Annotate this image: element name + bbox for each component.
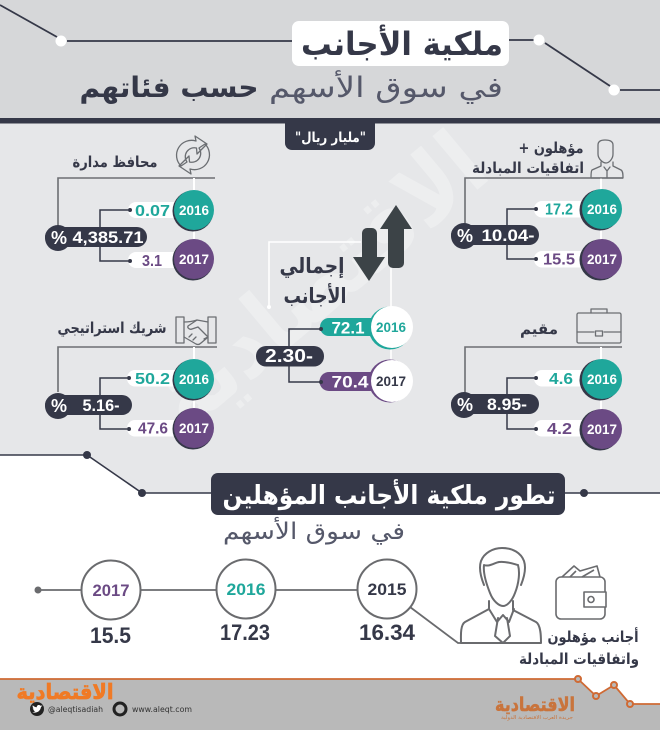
panel frame lines <box>58 178 215 226</box>
title box <box>292 21 509 66</box>
circle 2017: 2017 <box>587 422 617 437</box>
icon: twitter <box>30 702 44 716</box>
circle 2016: 2016 <box>179 372 209 387</box>
header band <box>0 0 660 118</box>
footer orange trend line <box>0 679 660 704</box>
panel: total foreigners: الأجانب <box>284 282 346 308</box>
circle 2017 <box>368 360 413 402</box>
node 2017: 2017 <box>92 581 130 600</box>
value 2017 <box>127 420 183 438</box>
value 2016 <box>534 201 589 218</box>
circle 2016 <box>172 190 214 232</box>
change pill <box>45 225 147 251</box>
value 2017 <box>534 251 589 268</box>
icon: refresh <box>177 136 209 174</box>
watermark: الاقتصادية <box>132 111 507 450</box>
website: www.aleqt.com <box>132 705 192 714</box>
twitter handle: @aleqtisadiah <box>48 705 103 714</box>
icon: briefcase <box>577 309 621 343</box>
icon: wallet <box>556 566 606 619</box>
value 2016: 50.2 <box>135 371 170 388</box>
node 2016: 17.23 <box>220 620 270 645</box>
node 2015 <box>358 560 416 645</box>
label: qualified foreign investors <box>519 627 639 668</box>
panel: qualified investors and swaps <box>451 139 623 280</box>
value 2017: 47.6 <box>138 420 168 438</box>
circle 2016: 2016 <box>587 202 617 217</box>
circle 2017 <box>580 409 622 450</box>
circle 2016 <box>580 189 622 230</box>
change pill <box>45 393 132 419</box>
value 2017: 3.1 <box>142 253 162 270</box>
connector <box>100 210 130 261</box>
node 2016 <box>216 560 276 645</box>
footer <box>0 676 660 730</box>
change pill: 10.04- <box>482 226 534 245</box>
heading connector lines <box>0 455 660 493</box>
label: مؤهلون + <box>518 139 584 157</box>
trend line dots <box>575 676 633 707</box>
section heading: qualified foreign ownership <box>0 451 660 545</box>
value 2017 <box>128 252 183 270</box>
circle 2017: 2017 <box>376 374 406 389</box>
unit badge: "مليار ريال" <box>295 130 366 146</box>
icon: up arrow <box>380 205 412 268</box>
title connector lines <box>0 5 660 90</box>
circle 2016 <box>172 359 214 400</box>
panel frame lines <box>465 178 623 225</box>
circle 2017: 2017 <box>179 252 209 267</box>
value 2017: 4.2 <box>547 421 572 438</box>
logo left: الاقتصادية <box>16 680 114 704</box>
title connector dots <box>56 34 620 96</box>
panel: resident <box>451 309 622 450</box>
connector <box>289 329 321 382</box>
value 2017 <box>534 420 589 438</box>
change pill: 8.95- <box>487 395 527 414</box>
node 2015: 16.34 <box>359 620 416 645</box>
change pill: % <box>51 228 67 248</box>
panel frame lines <box>58 347 217 392</box>
circle 2016 <box>580 359 622 400</box>
label: محافظ مدارة <box>72 153 158 171</box>
connector <box>507 378 536 429</box>
connector <box>507 209 536 259</box>
value 2016 <box>534 370 589 388</box>
footer band <box>0 679 660 730</box>
heading text: تطور ملكية الأجانب المؤهلين <box>222 479 556 511</box>
panel frame lines <box>465 347 622 393</box>
change pill: 2.30- <box>265 346 313 366</box>
change pill <box>256 346 324 366</box>
label: شريك استراتيجي <box>58 319 166 337</box>
circle 2016 <box>368 306 413 350</box>
body panel background <box>0 123 660 493</box>
node 2017 <box>82 560 140 648</box>
label: qualified foreign investors: واتفاقيات المبادلة <box>519 650 639 668</box>
value 2016 <box>127 370 183 388</box>
change pill: % <box>457 226 473 246</box>
circle 2016: 2016 <box>179 203 209 218</box>
logo tagline: جريدة العرب الاقتصادية الدولية <box>501 715 573 721</box>
value 2016: 72.1 <box>332 318 364 338</box>
value 2016: 17.2 <box>545 202 573 218</box>
heading box <box>211 473 565 515</box>
timeline line <box>38 590 540 643</box>
panel: qualified investors and swaps: اتفاقيات المبادلة <box>472 159 584 177</box>
main title: ملكية الأجانب <box>301 24 503 63</box>
circle 2017 <box>580 239 622 280</box>
change pill: 5.16- <box>82 396 120 415</box>
icon: large person <box>461 548 541 643</box>
subheading: في سوق الأسهم <box>223 517 405 545</box>
value 2016 <box>128 202 183 220</box>
subtitle bold: حسب فئاتهم <box>80 71 258 104</box>
label: إجمالي <box>280 254 344 278</box>
node 2015: 2015 <box>368 580 406 599</box>
value 2017: 15.5 <box>543 252 575 268</box>
change pill <box>451 223 539 249</box>
icon: person <box>591 140 623 178</box>
timeline <box>34 560 540 648</box>
value 2016: 0.07 <box>135 203 170 220</box>
circle 2017 <box>172 408 214 450</box>
label: qualified foreign investors: أجانب مؤهلون <box>548 627 638 646</box>
circle 2017: 2017 <box>587 252 617 267</box>
circle 2016: 2016 <box>376 320 406 335</box>
logo right: الاقتصادية <box>495 694 575 716</box>
panel: managed portfolios <box>45 136 215 280</box>
panel frame lines <box>269 242 391 362</box>
value 2016 <box>319 318 380 338</box>
icon: down arrow <box>353 228 385 281</box>
change pill: % <box>51 396 67 416</box>
value 2017: 70.4 <box>332 372 369 392</box>
node 2017: 15.5 <box>90 623 131 648</box>
circle 2017 <box>172 239 214 280</box>
change pill: % <box>457 395 473 415</box>
panel: strategic partner <box>45 317 217 450</box>
circle 2016: 2016 <box>587 372 617 387</box>
panel: total foreigners <box>256 205 413 402</box>
header divider bar <box>0 118 660 124</box>
change pill: 4,385.71 <box>72 228 144 247</box>
icon: handshake <box>176 317 216 344</box>
unit badge <box>285 123 375 150</box>
circle 2017: 2017 <box>179 421 209 436</box>
subtitle regular: في سوق الأسهم <box>269 69 503 104</box>
node 2016: 2016 <box>226 580 266 599</box>
connector <box>100 378 129 429</box>
value 2017 <box>319 372 380 392</box>
label: مقيم <box>520 320 558 338</box>
title block <box>0 5 660 104</box>
change pill <box>451 392 539 418</box>
icon: web <box>114 703 126 715</box>
value 2016: 4.6 <box>549 371 573 388</box>
